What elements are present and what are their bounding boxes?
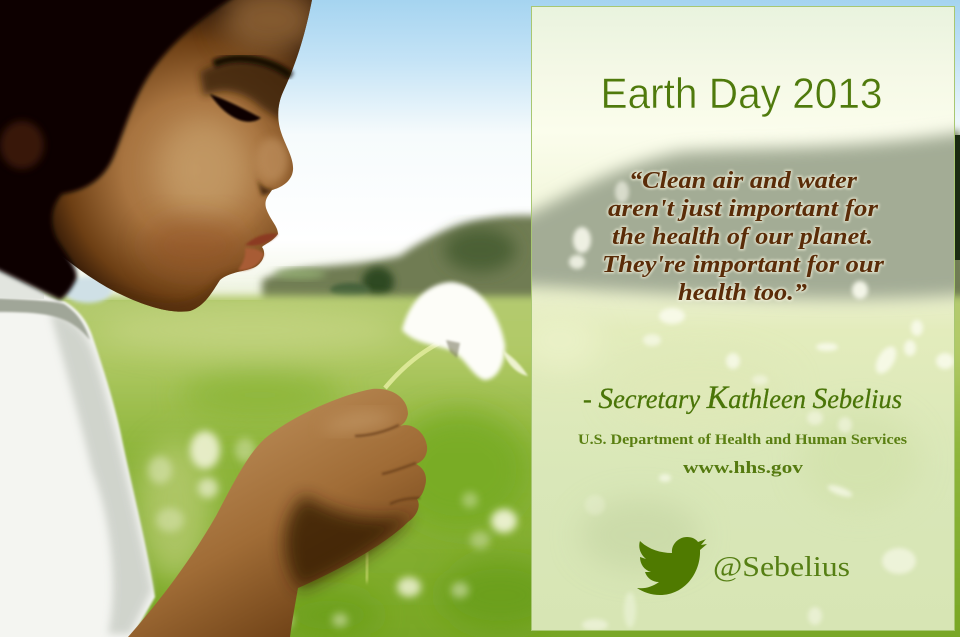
- photo: arm and hand: [128, 389, 427, 637]
- quote text: health too.”: [678, 280, 807, 306]
- background: sky: [0, 0, 960, 300]
- panel photo: faded dandelion seeds: [569, 181, 954, 631]
- panel photo: faded field tones: [533, 328, 908, 566]
- panel: quote card: [500, 6, 960, 631]
- quote text: the health of our planet.: [612, 224, 873, 250]
- photo: hair: [0, 0, 245, 300]
- nose shadow: [256, 180, 276, 198]
- background: distant hills: [262, 130, 960, 320]
- nose light: [256, 138, 288, 182]
- quote text: the health of our planet.: [612, 224, 873, 250]
- photo: child's shirt: [0, 262, 155, 637]
- lower stem: [366, 552, 368, 582]
- quote text: They're important for our: [602, 252, 885, 278]
- forehead light: [220, 0, 320, 56]
- background: grass field: [0, 296, 960, 637]
- quote text: health too.”: [678, 280, 807, 306]
- quote text: They're important for our: [602, 252, 885, 278]
- quote text: “Clean air and water: [629, 168, 858, 194]
- attribution signature: - Secretary Kathleen Sebelius: [583, 380, 902, 416]
- jaw shadow: [111, 264, 259, 312]
- cheek blush: [145, 217, 245, 273]
- seed head centre: [446, 340, 460, 358]
- department name: U.S. Department of Health and Human Services: [578, 432, 907, 448]
- twitter handle: @Sebelius: [713, 551, 850, 583]
- heading: Earth Day 2013: Earth Day 2013: [600, 70, 882, 118]
- seed head: [402, 282, 505, 380]
- quote text: “Clean air and water: [629, 168, 858, 194]
- website: www.hhs.gov: [683, 458, 804, 477]
- photo: dandelion: [366, 282, 528, 582]
- panel photo: faded hills: [500, 128, 960, 299]
- cheek highlight: [161, 118, 249, 222]
- icon: twitter bird: [637, 537, 707, 595]
- photo: lips: [238, 233, 278, 270]
- photo: eyebrow and closed eye: [211, 59, 291, 121]
- stem: [385, 343, 439, 388]
- quote text: [602, 168, 885, 306]
- quote text: aren't just important for: [608, 196, 879, 222]
- photo: ear highlight: [0, 121, 44, 169]
- eye socket shadow: [200, 60, 298, 122]
- quote text: aren't just important for: [608, 196, 879, 222]
- background: grass texture and blurred flowers: [100, 308, 560, 637]
- photo: child's face: [48, 0, 312, 312]
- loose seed: [502, 350, 528, 376]
